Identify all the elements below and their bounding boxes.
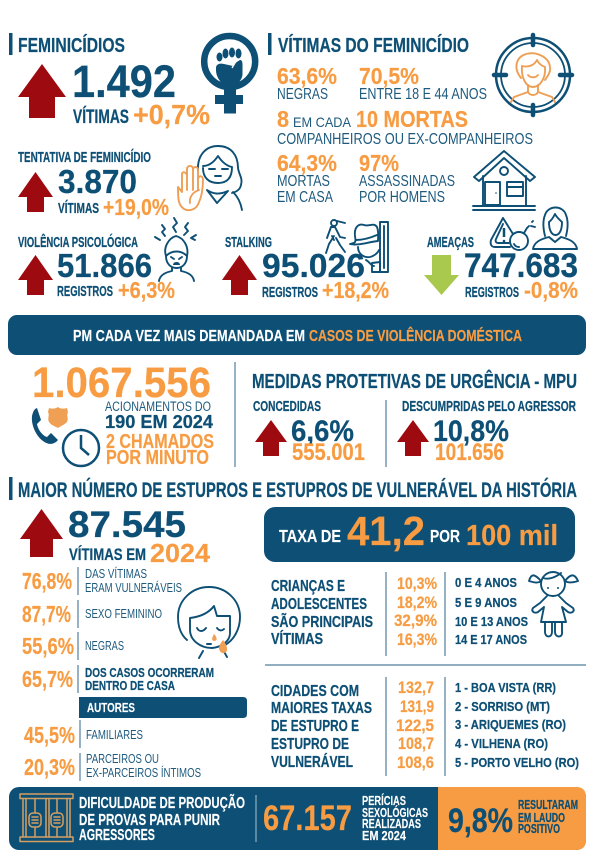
heading: tentativa: TENTATIVA DE FEMINICÍDIO xyxy=(18,149,151,166)
text: perícias: EM 2024 xyxy=(362,828,407,843)
stat: mortas em casa: 64,3% xyxy=(277,150,337,176)
change: +6,3%: +6,3% xyxy=(118,277,175,303)
age ranges: 10 E 13 ANOS xyxy=(455,614,528,629)
row: parceiros: PARCEIROS OU xyxy=(86,751,159,766)
age ranges xyxy=(455,575,528,647)
icon: warning, bomb and woman xyxy=(491,208,577,250)
column: descumpridas xyxy=(397,399,576,466)
stat: 8 em cada 10 mortas: COMPANHEIROS OU EX-COMPANHEIROS xyxy=(277,131,533,148)
stat: 1.067.556: 1.067.556 xyxy=(32,359,211,407)
panel: violência psicológica xyxy=(18,218,196,303)
text: cidades: VULNERÁVEL xyxy=(271,752,353,771)
banner: PM cada vez mais demandada: CASOS DE VIOLÊNCIA DOMÉSTICA xyxy=(309,326,522,345)
text: acionamentos do 190: ACIONAMENTOS DO xyxy=(105,399,211,414)
stat: 8 em cada 10 mortas: 8 xyxy=(277,106,289,132)
text: cidades: DE ESTUPRO E xyxy=(271,718,359,735)
column: concedidas xyxy=(253,399,365,466)
icon: woman in target xyxy=(494,35,572,115)
text: perícias: SEXOLÓGICAS xyxy=(362,805,428,820)
text: resultaram: EM LAUDO xyxy=(518,811,565,825)
panel: medidas protetivas xyxy=(252,369,577,467)
stat: 8 em cada 10 mortas: 10 MORTAS xyxy=(356,106,468,132)
age ranges: 14 E 17 ANOS xyxy=(455,632,527,647)
text: dificuldade: DE PROVAS PARA PUNIR xyxy=(79,812,220,829)
change: +18,2%: +18,2% xyxy=(322,277,389,303)
column: concedidas: 6,6% xyxy=(291,415,354,448)
city names xyxy=(455,680,579,770)
heading: ameaças: AMEAÇAS xyxy=(427,235,474,251)
rates: 131,9 xyxy=(400,698,434,716)
row: parceiros: EX-PARCEIROS ÍNTIMOS xyxy=(86,765,201,780)
row: dentro de casa: 65,7% xyxy=(22,666,73,692)
icon: jail bars xyxy=(20,794,73,842)
percentages by age: 18,2% xyxy=(397,594,437,612)
rates: 122,5 xyxy=(396,717,434,735)
change: -0,8%: -0,8% xyxy=(524,277,578,303)
heading: stalking: STALKING xyxy=(225,235,272,251)
arrow: up xyxy=(18,64,66,118)
stat: assassinadas por homens: 97% xyxy=(359,150,399,176)
age ranges: 5 E 9 ANOS xyxy=(455,595,517,610)
icon: woman with raised hand xyxy=(178,146,242,210)
text: cidades xyxy=(271,683,372,771)
row: vulneráveis: DAS VÍTIMAS xyxy=(85,566,147,581)
stat: 3.870: 3.870 xyxy=(58,163,137,200)
stat: assassinadas por homens: POR HOMENS xyxy=(359,189,445,206)
text: 2 chamados por minuto: POR MINUTO xyxy=(106,447,209,469)
city names: 2 - SORRISO (MT) xyxy=(455,699,550,714)
icon: house xyxy=(473,151,535,210)
rates: 132,7 xyxy=(398,679,434,697)
text: cidades: CIDADES COM xyxy=(271,683,359,700)
row: vulneráveis: 76,8% xyxy=(22,568,72,594)
rates xyxy=(396,679,434,772)
row: parceiros: 20,3% xyxy=(24,754,75,780)
row: sexo feminino: SEXO FEMININO xyxy=(85,606,162,621)
panel: cidades com maiores taxas xyxy=(271,677,579,776)
stat: 9,8%: 9,8% xyxy=(448,802,513,840)
text: cidades: ESTUPRO DE xyxy=(271,736,349,753)
stat: 18 a 44 anos xyxy=(359,63,487,103)
divider: vertical xyxy=(234,362,236,467)
row: negras: NEGRAS xyxy=(85,638,124,653)
percentages by age: 16,3% xyxy=(397,631,437,649)
text: acionamentos do 190: 190 EM 2024 xyxy=(105,412,213,432)
row: parceiros xyxy=(24,751,201,781)
rates: 108,6 xyxy=(397,754,434,772)
age ranges: 0 E 4 ANOS xyxy=(455,575,517,590)
text: 2 chamados por minuto xyxy=(106,431,214,469)
label: registros: REGISTROS xyxy=(262,285,318,301)
column: concedidas: 555.001 xyxy=(292,439,365,466)
callout: taxa por 100 mil: POR xyxy=(430,526,460,546)
panel: tentativa de feminicídio xyxy=(18,146,242,220)
text: perícias xyxy=(362,793,428,843)
column: concedidas: CONCEDIDAS xyxy=(253,399,321,415)
city names: 3 - ARIQUEMES (RO) xyxy=(455,717,566,732)
row: negras: 55,6% xyxy=(22,633,74,659)
text: crianças e adolescentes: VÍTIMAS xyxy=(271,629,323,648)
stat: negras: NEGRAS xyxy=(277,86,328,103)
divider xyxy=(386,572,445,656)
row: dentro de casa: DENTRO DE CASA xyxy=(85,678,175,693)
arrow: up xyxy=(18,172,53,212)
percentages by age xyxy=(394,575,437,649)
icon: distressed woman xyxy=(155,218,196,281)
text: 2 chamados por minuto: 2 CHAMADOS xyxy=(106,431,214,453)
stat: 87.545: 87.545 xyxy=(68,504,186,545)
label: vítimas: VÍTIMAS xyxy=(73,106,129,128)
stat: negras xyxy=(277,63,337,103)
stat: assassinadas por homens: ASSASSINADAS xyxy=(359,173,455,190)
percentages by age: 32,9% xyxy=(394,612,437,630)
panel: ameaças xyxy=(424,208,578,303)
column: descumpridas: 101.656 xyxy=(435,439,504,466)
callout: taxa por 100 mil: 41,2 xyxy=(347,508,425,554)
panel: stalking xyxy=(222,220,389,303)
label: vítimas: VÍTIMAS xyxy=(58,200,99,217)
panel: acionamentos do 190 xyxy=(32,359,214,469)
city names: 1 - BOA VISTA (RR) xyxy=(455,680,556,695)
background band xyxy=(9,787,586,850)
stat: 95.026: 95.026 xyxy=(262,247,365,284)
panel: crianças e adolescentes xyxy=(271,572,578,656)
callout: taxa por 100 mil xyxy=(264,507,575,562)
icon: feminist fist xyxy=(204,36,255,114)
stat: assassinadas por homens xyxy=(359,150,455,206)
panel: feminicídios xyxy=(9,33,255,130)
text: crianças e adolescentes xyxy=(271,578,373,648)
row: vulneráveis xyxy=(22,566,182,595)
callout: taxa por 100 mil: TAXA DE xyxy=(279,526,341,546)
stat: 1.492: 1.492 xyxy=(72,56,176,107)
text: crianças e adolescentes: CRIANÇAS E xyxy=(271,578,345,595)
stat: 51.866: 51.866 xyxy=(57,247,152,284)
heading: feminicídios xyxy=(9,33,125,57)
text: acionamentos do 190 xyxy=(105,399,213,432)
city names: 4 - VILHENA (RO) xyxy=(455,736,548,751)
heading: violência psicológica: VIOLÊNCIA PSICOLÓGICA xyxy=(18,233,138,251)
label: registros: REGISTROS xyxy=(57,284,113,300)
text: perícias: PERÍCIAS xyxy=(362,793,406,808)
text: cidades: MAIORES TAXAS xyxy=(271,700,372,717)
stat: 18 a 44 anos: ENTRE 18 E 44 ANOS xyxy=(359,86,487,103)
percentages by age: 10,3% xyxy=(397,575,437,593)
panel: vítimas do feminicídio xyxy=(268,33,572,210)
divider xyxy=(255,795,257,842)
text: resultaram xyxy=(518,798,578,836)
arrow: up xyxy=(222,255,257,295)
row: familiares: 45,5% xyxy=(24,722,75,748)
label: vítimas em 2024: VÍTIMAS EM xyxy=(69,545,146,564)
text: crianças e adolescentes: SÃO PRINCIPAIS xyxy=(271,611,373,631)
text: perícias: REALIZADAS xyxy=(362,816,421,831)
row: sexo feminino: 87,7% xyxy=(22,601,71,627)
row: sexo feminino xyxy=(22,600,162,628)
text: crianças e adolescentes: ADOLESCENTES xyxy=(271,596,367,613)
stat: 18 a 44 anos: 70,5% xyxy=(359,63,419,89)
row: negras xyxy=(22,632,124,660)
text: dificuldade: DIFICULDADE DE PRODUÇÃO xyxy=(79,792,245,812)
column: descumpridas: 10,8% xyxy=(433,415,509,448)
heading: vítimas do feminicídio: VÍTIMAS DO FEMINICÍDIO xyxy=(278,34,469,57)
divider: horizontal xyxy=(265,664,586,666)
icon: phone, badge and clock xyxy=(32,407,99,466)
icon: crying face xyxy=(178,587,240,658)
rates: 108,7 xyxy=(398,735,434,753)
heading: feminicídios: FEMINICÍDIOS xyxy=(18,34,125,57)
banner: PM cada vez mais demandada xyxy=(8,315,586,355)
text: dificuldade xyxy=(79,792,245,844)
stat: negras: 63,6% xyxy=(277,63,337,89)
change: +19,0%: +19,0% xyxy=(103,194,169,220)
stat: mortas em casa xyxy=(277,150,337,206)
arrow: down xyxy=(424,255,459,295)
row: dentro de casa: DOS CASOS OCORRERAM xyxy=(85,665,214,680)
row: familiares: FAMILIARES xyxy=(86,727,143,742)
text: dificuldade: AGRESSORES xyxy=(79,827,155,844)
change: +0,7%: +0,7% xyxy=(133,99,210,130)
icon: girl xyxy=(529,572,578,636)
stat: 8 em cada 10 mortas xyxy=(277,106,533,148)
callout: taxa por 100 mil: 100 mil xyxy=(466,520,558,552)
icon: woman followed by spy xyxy=(326,220,388,272)
label bar: autores xyxy=(79,697,247,718)
stat: mortas em casa: EM CASA xyxy=(277,189,334,206)
label: vítimas em 2024 xyxy=(69,538,211,568)
text: resultaram: POSITIVO xyxy=(518,822,560,836)
stat: 747.683: 747.683 xyxy=(464,247,578,285)
stat: 8 em cada 10 mortas: EM CADA xyxy=(293,114,352,130)
panel: dificuldade de provas xyxy=(9,787,586,850)
arrow: up xyxy=(20,509,63,557)
label bar: autores: AUTORES xyxy=(87,700,135,715)
stat: 67.157: 67.157 xyxy=(263,799,352,838)
label: registros: REGISTROS xyxy=(465,285,519,301)
divider: column xyxy=(385,400,387,467)
arrow: up xyxy=(18,255,53,295)
label: vítimas em 2024: 2024 xyxy=(150,538,211,568)
divider xyxy=(386,677,445,776)
row: familiares xyxy=(24,720,143,748)
banner: PM cada vez mais demandada: PM CADA VEZ MAIS DEMANDADA EM xyxy=(73,328,305,345)
stat: mortas em casa: MORTAS xyxy=(277,173,330,190)
row: dentro de casa xyxy=(22,665,214,693)
panel: vítimas de estupro xyxy=(20,504,247,781)
heading: vítimas do feminicídio xyxy=(268,33,469,57)
row: vulneráveis: ERAM VULNERÁVEIS xyxy=(85,580,182,595)
